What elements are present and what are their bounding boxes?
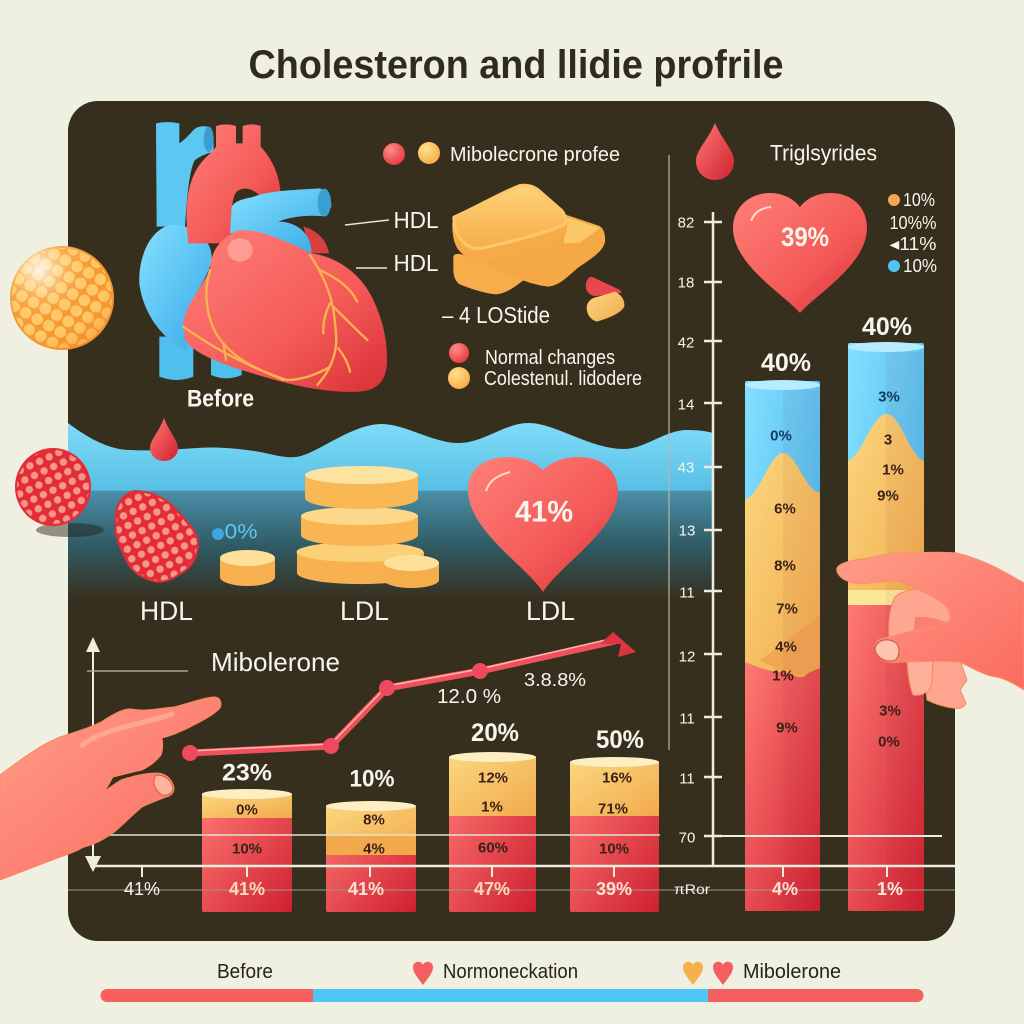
bar: short A: 23% (222, 760, 272, 786)
axis: right chart scale: 11 (679, 770, 695, 788)
axis labels row: 41% (124, 879, 160, 899)
bar: short B (326, 766, 416, 912)
LDL heart group: LDL (526, 596, 575, 626)
vein top left (156, 122, 214, 227)
axis: right chart scale: 11 (679, 584, 695, 602)
bar: tall left: 0% (770, 428, 792, 444)
LDL tablet stack: LDL (340, 596, 389, 626)
bar: short A (202, 760, 292, 912)
axis: right chart scale: 18 (678, 274, 694, 292)
bar: tall right (848, 313, 924, 911)
axis labels row: 41% (348, 879, 384, 899)
bar: short C: 1% (481, 798, 503, 816)
LDL heart group (468, 457, 618, 626)
small disc (384, 563, 439, 588)
legend: percent list (888, 190, 937, 276)
HDL callouts: HDL (394, 250, 439, 276)
bar: tall left: 1% (772, 668, 794, 684)
HDL callouts (345, 207, 439, 276)
icon: small capsules (586, 277, 624, 322)
bottom disc (297, 552, 424, 584)
bar: short D: 10% (599, 840, 629, 858)
small red chamber (303, 227, 329, 253)
axis: right chart scale: 12 (679, 648, 695, 666)
thumb nail (875, 640, 899, 661)
axis labels row: 1% (877, 879, 903, 899)
bar: tall left: 8% (774, 558, 796, 574)
legend: profile dots (383, 142, 620, 166)
LDL tablet stack (296, 466, 439, 626)
bar: short A: 0% (236, 802, 258, 818)
title: Cholesteron and llidie profrile (248, 43, 784, 87)
axis labels row: 4% (772, 879, 798, 899)
top tablet face (454, 185, 566, 248)
side line: left vertical (668, 155, 670, 750)
legend: footer (217, 961, 841, 985)
axis: right chart scale: 43 (678, 460, 694, 476)
bar: short D: 50% (596, 726, 644, 754)
heart body (183, 230, 387, 392)
bar: tall right: 9% (877, 488, 899, 504)
legend: percent list: 10% (903, 190, 935, 210)
LDL heart group: 41% (515, 496, 573, 528)
icon: yellow heart (683, 962, 703, 985)
bar: tall left: 4% (775, 638, 797, 656)
axis: right chart scale: 13 (679, 522, 695, 540)
value: 0% small tablet: 0% (224, 520, 258, 544)
line chart: 12.0 % (437, 686, 501, 708)
icon: red berry particle (115, 490, 199, 583)
icon: heart 39% (733, 193, 867, 313)
bar: tall right: 0% (878, 734, 900, 750)
axis labels row (124, 879, 903, 899)
bar: short C: 12% (478, 770, 508, 786)
bar: short B: 8% (363, 812, 385, 828)
icon: heart 41% (468, 457, 618, 592)
text: Mibolerone: Mibolerone (211, 647, 340, 677)
heading: triglycerides: Triglsyrides (770, 140, 877, 166)
icon: orange lipid sphere (10, 246, 114, 350)
label: Mibolerone: Mibolerone (743, 961, 841, 983)
axis labels row: 47% (474, 879, 510, 899)
icon: red lipid sphere (15, 448, 104, 537)
axis: right chart scale: 70 (679, 830, 695, 846)
axis labels row: πRor (674, 881, 710, 897)
axis: right chart scale (678, 212, 722, 866)
panel: main dark board (68, 101, 955, 941)
lower finger (926, 660, 967, 708)
bar: short D (570, 726, 659, 912)
bar: short B: 4% (363, 840, 385, 858)
bar: tall left: 7% (776, 600, 798, 618)
bar: short D: 71% (598, 800, 628, 818)
legend: percent list: 10% (903, 256, 937, 276)
hand: left pointing (0, 697, 221, 880)
middle disc (301, 516, 418, 546)
folded finger (889, 589, 955, 645)
aorta (186, 124, 281, 243)
bar: tall right: 3 (884, 432, 892, 448)
lower finger two (907, 660, 933, 695)
legend: changes: Normal changes (485, 347, 615, 369)
axis: right chart scale: 11 (679, 710, 695, 728)
axis: right chart scale: 42 (678, 334, 694, 352)
bar: short C (449, 719, 536, 912)
legend: profile dots: Mibolecrone profee (450, 144, 620, 166)
icon: blood drop middle (150, 418, 178, 461)
legend: changes: Colestenul. lidodere (484, 368, 642, 390)
lower veins (159, 337, 242, 380)
label: Normoneckation: Normoneckation (443, 961, 578, 983)
bar: short C: 60% (478, 840, 508, 856)
coronary vessels (183, 255, 367, 385)
legend: percent list: 10%% (890, 213, 936, 233)
icon: red heart (413, 962, 433, 985)
bar: short C: 20% (471, 719, 519, 747)
axis: right chart scale: 14 (678, 396, 694, 414)
bar: tall right: 1% (882, 462, 904, 478)
axis: right chart scale: 82 (678, 214, 694, 232)
bar: tall left: 6% (774, 500, 796, 518)
axis labels row: 41% (229, 879, 265, 899)
hand: right pointing (837, 552, 1024, 708)
icon: blood drop top (696, 123, 734, 180)
top tablet side (452, 222, 567, 261)
icon: second red heart (713, 962, 733, 985)
footer colour bar (100, 989, 924, 1002)
palm, index and thumb (837, 552, 1024, 690)
bar: tall left: 40% (761, 349, 811, 377)
HDL group (115, 490, 199, 626)
axis labels row: 39% (596, 879, 632, 899)
wave band (68, 423, 712, 594)
text: 4 LOStide: – 4 LOStide (442, 302, 550, 328)
lower left tablet (455, 255, 523, 293)
line chart: 3.8.8% (524, 670, 586, 690)
line chart (182, 632, 636, 761)
HDL group: HDL (140, 596, 193, 626)
bar: tall right: 40% (862, 313, 912, 341)
bar: tall left (745, 349, 820, 911)
legend: percent list: ◂11% (890, 234, 936, 254)
label: Before: Before (187, 386, 254, 412)
pulmonary artery (230, 188, 331, 253)
bar: short A: 10% (232, 840, 262, 858)
bar: tall left: 9% (776, 720, 798, 736)
icon: heart 39%: 39% (781, 222, 829, 252)
axis: left arrow (85, 637, 188, 872)
bar: short D: 16% (602, 770, 632, 786)
legend: changes (448, 343, 642, 390)
label: Before: Before (217, 961, 273, 983)
icon: anatomical heart (139, 122, 387, 392)
icon: orange tablets (452, 185, 603, 293)
bar: tall right: 3% (879, 702, 901, 720)
bar: tall right: 3% (878, 388, 900, 406)
atrium (139, 225, 212, 351)
bar: short B: 10% (350, 766, 394, 792)
top disc (305, 476, 418, 509)
value: 0% small tablet (212, 520, 275, 586)
right tablet (482, 217, 603, 285)
HDL callouts: HDL (394, 207, 439, 233)
